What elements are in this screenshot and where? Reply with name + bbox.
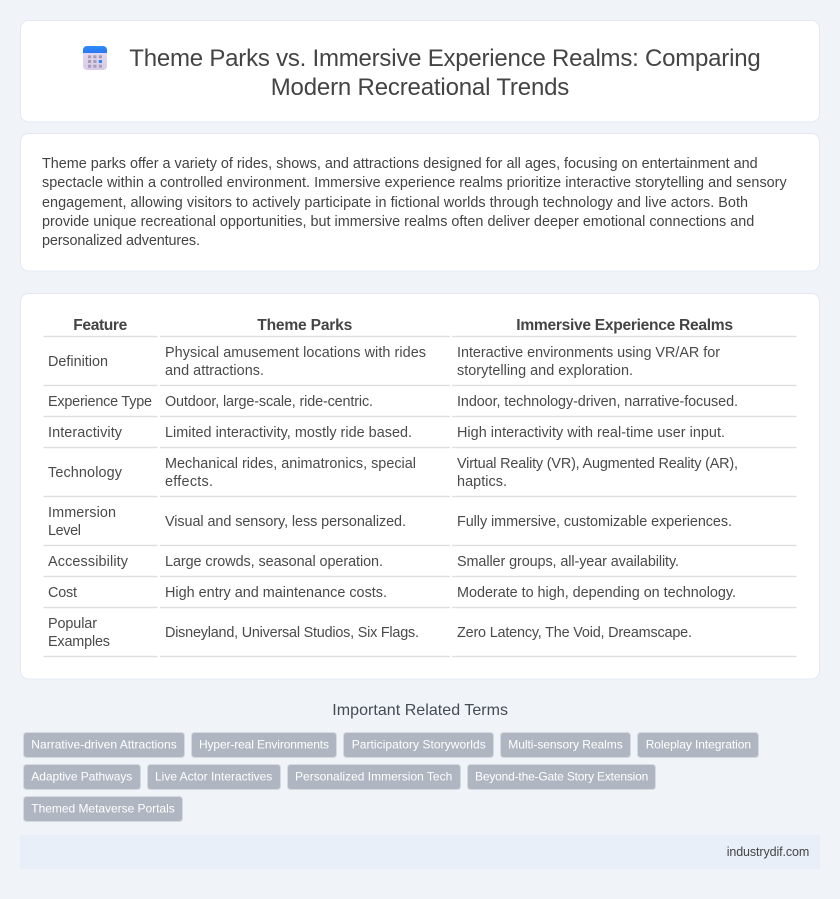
tag: Multi-sensory Realms (508, 738, 623, 752)
table header (73, 317, 733, 334)
row: definition: Interactive environments using VR/AR for (457, 345, 720, 361)
footer bar (20, 835, 820, 869)
tag (468, 764, 656, 790)
tag: Themed Metaverse Portals (31, 802, 175, 816)
row: interactivity (48, 425, 725, 441)
row: cost (48, 585, 736, 601)
row: experience type (48, 394, 738, 410)
row: cost: High entry and maintenance costs. (165, 585, 387, 601)
row: definition: and attractions. (165, 363, 264, 379)
row: definition (48, 345, 720, 379)
row: technology: haptics. (457, 474, 507, 490)
footer source: industrydif.com (727, 845, 809, 859)
tag (344, 732, 494, 758)
tag (288, 764, 460, 790)
intro text: engagement, allowing visitors to actively participate in fictional worlds through technology and live actors. Both (42, 195, 748, 211)
row: definition: storytelling and exploration. (457, 363, 633, 379)
table header: Theme Parks (257, 317, 353, 334)
row: immersion level: Visual and sensory, less personalized. (165, 514, 406, 530)
intro text (42, 156, 787, 249)
row: technology (48, 456, 738, 490)
row: technology: effects. (165, 474, 213, 490)
tag: Hyper-real Environments (199, 738, 329, 752)
intro text: spectacle within a controlled environment. Immersive experience realms prioritize interactive storytelling and sensory (42, 175, 787, 191)
title: Modern Recreational Trends (271, 74, 569, 101)
row: experience type: Indoor, technology-driven, narrative-focused. (457, 394, 738, 410)
row: technology: Mechanical rides, animatronics, special (165, 456, 416, 472)
row: technology: Technology (48, 465, 123, 481)
intro text: personalized adventures. (42, 233, 200, 249)
row: accessibility: Accessibility (48, 554, 129, 570)
row: popular examples: Popular (48, 616, 97, 632)
row: experience type: Experience Type (48, 394, 152, 410)
row: accessibility: Large crowds, seasonal operation. (165, 554, 383, 570)
tag (24, 796, 182, 822)
row: interactivity: High interactivity with real-time user input. (457, 425, 725, 441)
table rules (43, 336, 797, 657)
row: popular examples: Disneyland, Universal Studios, Six Flags. (165, 625, 419, 641)
row: accessibility: Smaller groups, all-year availability. (457, 554, 679, 570)
related terms tags (24, 732, 758, 822)
row: interactivity: Limited interactivity, mostly ride based. (165, 425, 412, 441)
row: cost: Moderate to high, depending on technology. (457, 585, 736, 601)
related terms heading: Important Related Terms (332, 702, 508, 719)
table header: Feature (73, 317, 128, 334)
row: interactivity: Interactivity (48, 425, 123, 441)
tag: Live Actor Interactives (155, 770, 272, 784)
row: immersion level (48, 505, 732, 539)
row: immersion level: Immersion (48, 505, 116, 521)
tag: Adaptive Pathways (31, 770, 132, 784)
tag: Beyond-the-Gate Story Extension (475, 770, 648, 784)
tag: Participatory Storyworlds (352, 738, 486, 752)
tag (638, 732, 758, 758)
tag (24, 732, 184, 758)
row: definition: Physical amusement locations with rides (165, 345, 426, 361)
header card (20, 20, 820, 122)
tag (148, 764, 280, 790)
row: definition: Definition (48, 354, 108, 370)
table header: Immersive Experience Realms (516, 317, 733, 334)
intro text: Theme parks offer a variety of rides, shows, and attractions designed for all ages, focusing on entertainment and (42, 156, 758, 172)
table card (20, 294, 820, 679)
tag: Roleplay Integration (646, 738, 751, 752)
row: immersion level: Fully immersive, customizable experiences. (457, 514, 732, 530)
tag (500, 732, 630, 758)
tag: Personalized Immersion Tech (295, 770, 452, 784)
row: accessibility (48, 554, 679, 570)
title: Theme Parks vs. Immersive Experience Realms: Comparing (129, 45, 761, 72)
row: technology: Virtual Reality (VR), Augmented Reality (AR), (457, 456, 738, 472)
title (129, 45, 761, 101)
intro text: provide unique recreational opportunities, but immersive realms often deliver deeper emotional connections and (42, 214, 754, 230)
row: popular examples: Zero Latency, The Void, Dreamscape. (457, 625, 692, 641)
tag (24, 764, 140, 790)
row: popular examples (48, 616, 692, 650)
tag (192, 732, 336, 758)
row: cost: Cost (48, 585, 77, 601)
row: popular examples: Examples (48, 634, 110, 650)
tag: Narrative-driven Attractions (31, 738, 177, 752)
row: experience type: Outdoor, large-scale, ride-centric. (165, 394, 373, 410)
row: immersion level: Level (48, 523, 81, 539)
intro card (20, 134, 820, 271)
icon: calendar (83, 46, 107, 70)
